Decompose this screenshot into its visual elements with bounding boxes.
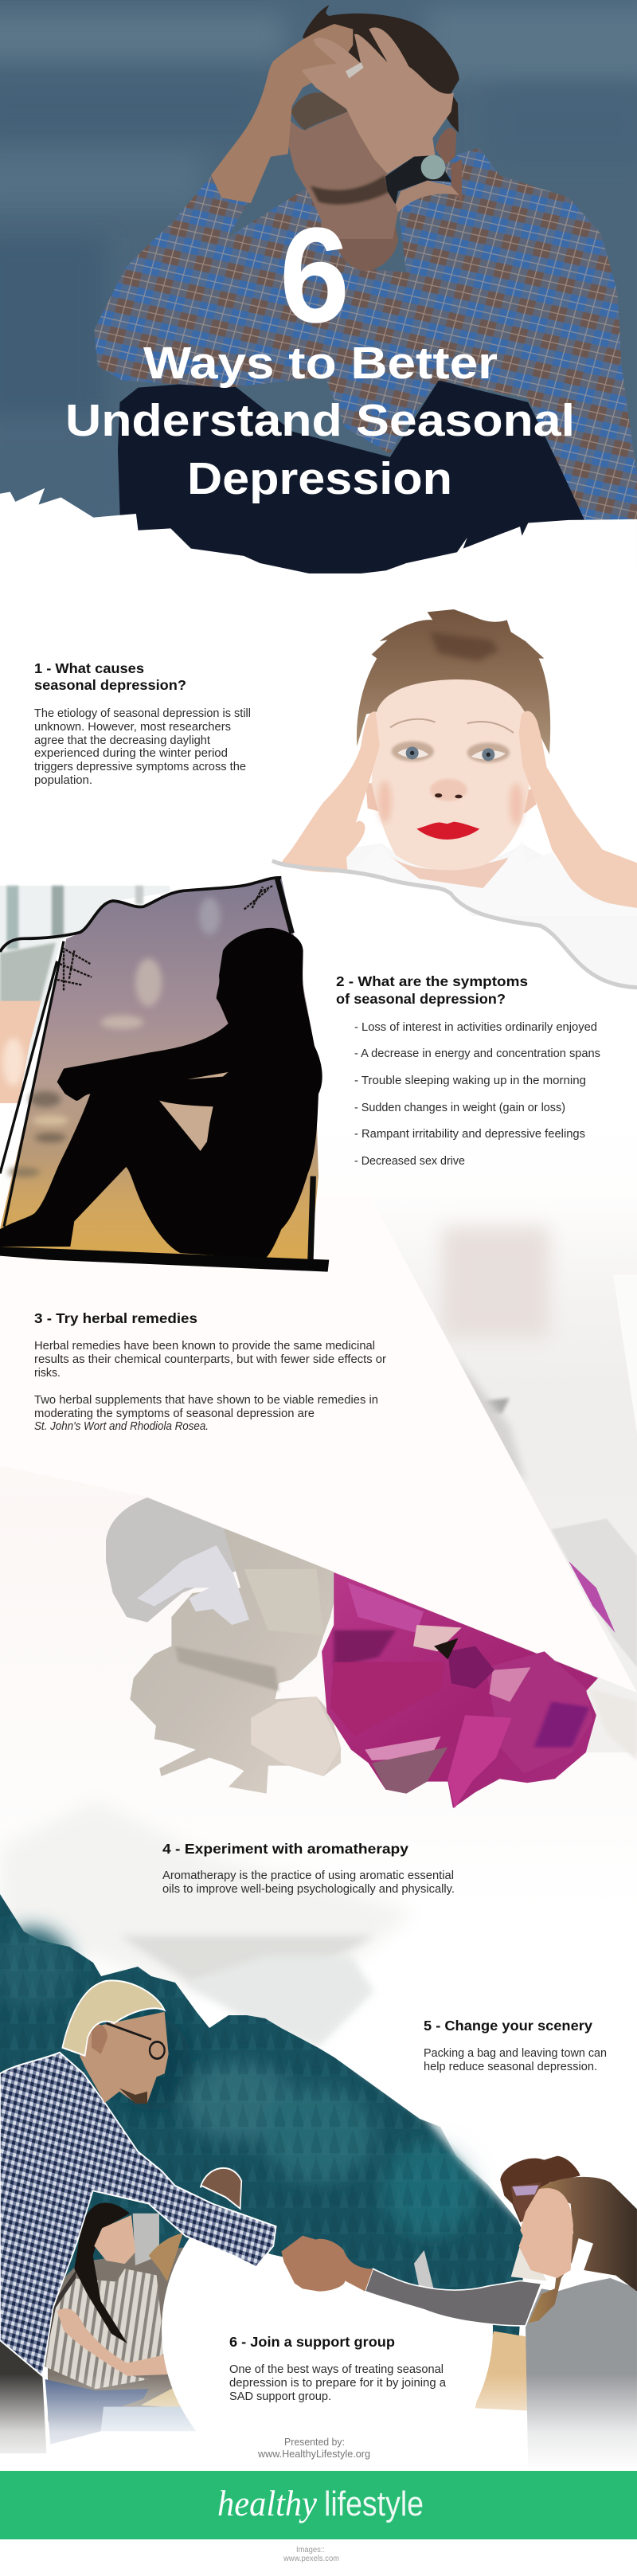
presented by credit: Presented by: — [284, 2437, 345, 2448]
section 1 text: unknown. However, most researchers — [34, 721, 231, 734]
section 1 text: The etiology of seasonal depression is still — [34, 707, 251, 720]
window sill — [0, 1247, 329, 1272]
image credit — [283, 2546, 339, 2563]
flower photo on folded paper — [106, 1497, 637, 1808]
seated woman left — [44, 2202, 201, 2445]
sunset sky — [0, 878, 318, 1260]
tree twigs — [57, 886, 273, 990]
symptoms list — [354, 1021, 600, 1168]
section 2 text: 2 - What are the symptoms — [336, 973, 528, 989]
magenta flower — [322, 1572, 598, 1808]
nose — [430, 779, 467, 801]
hair front — [291, 92, 348, 130]
hair dark patch — [430, 632, 499, 661]
image credit: Images:: — [296, 2546, 325, 2554]
flower behind paper — [551, 1519, 637, 1760]
healthy lifestyle logo: healthy — [217, 2483, 318, 2523]
presented by credit — [257, 2437, 370, 2460]
section 4 text: Aromatherapy is the practice of using aromatic essential — [162, 1869, 454, 1882]
symptoms list: - Decreased sex drive — [354, 1155, 465, 1168]
group photo — [0, 1980, 637, 2496]
wavy hair — [528, 2177, 637, 2323]
background fog and flower area — [0, 1115, 637, 1912]
section 3 text — [34, 1310, 386, 1433]
ring — [346, 62, 364, 78]
forest light and shade — [0, 1928, 478, 2238]
section 2 text — [336, 973, 600, 1168]
wooden table right — [475, 2331, 531, 2411]
hero number 6: 6 — [279, 200, 350, 351]
blond hair — [62, 1980, 165, 2056]
section 5 text: 5 - Change your scenery — [424, 2018, 592, 2034]
section 5 text — [424, 2018, 607, 2073]
section 5 text: help reduce seasonal depression. — [424, 2061, 597, 2073]
section 3 text: Two herbal supplements that have shown to be viable remedies in — [34, 1394, 378, 1407]
section 2 text: of seasonal depression? — [336, 991, 506, 1007]
room behind seated people — [48, 2246, 191, 2421]
section 1 text: 1 - What causes — [34, 660, 144, 676]
person behind woman — [500, 2156, 580, 2222]
section 6 text: One of the best ways of treating seasonal — [229, 2363, 444, 2376]
healthy lifestyle logo: lifestyle — [324, 2484, 424, 2523]
plaid shirt — [94, 148, 637, 521]
red lips — [416, 822, 479, 840]
blurred candle scene — [334, 1195, 637, 1752]
white flower — [130, 1528, 341, 1794]
symptoms list: - A decrease in energy and concentration spans — [354, 1047, 600, 1060]
section 1 text: triggers depressive symptoms across the — [34, 761, 246, 773]
forehead and face — [288, 112, 398, 239]
shirt — [0, 2053, 276, 2376]
hero title — [65, 338, 575, 504]
cheek blush — [378, 781, 523, 826]
blond man in checked shirt — [0, 1980, 276, 2453]
section 4 text: oils to improve well-being psychologically and physically. — [162, 1883, 455, 1896]
folded paper sheet — [0, 1195, 637, 1693]
section 1 text: population. — [34, 774, 92, 787]
window frame — [0, 878, 313, 1260]
section 6 text: SAD support group. — [229, 2390, 331, 2403]
section 1 text: seasonal depression? — [34, 677, 186, 693]
healthy lifestyle logo — [217, 2483, 424, 2523]
hero photo: man holding his head — [0, 0, 637, 585]
fade to white at bottom — [0, 2374, 637, 2471]
section 6 text: depression is to prepare for it by joining a — [229, 2377, 447, 2390]
flower petal details — [330, 1583, 593, 1808]
symptoms list: - Loss of interest in activities ordinarily enjoyed — [354, 1021, 597, 1034]
section 3 text: results as their chemical counterparts, but with fewer side effects or — [34, 1353, 386, 1366]
section 3 text: risks. — [34, 1367, 61, 1380]
fog over ridge — [350, 2047, 565, 2222]
hero title: Understand Seasonal — [65, 395, 575, 446]
section 3 text: 3 - Try herbal remedies — [34, 1310, 197, 1326]
tree texture — [0, 1894, 526, 2358]
misty hills behind forest — [0, 1800, 414, 2047]
white petal details — [137, 1545, 341, 1776]
section 3 text: Herbal remedies have been known to provide the same medicinal — [34, 1340, 375, 1353]
section 1 text: agree that the decreasing daylight — [34, 734, 210, 747]
photo: silhouette at window — [0, 878, 329, 1272]
section 1 text — [34, 660, 251, 787]
right hand — [301, 27, 454, 174]
glasses — [106, 2023, 165, 2059]
photo: stressed woman — [281, 609, 637, 916]
section 3 text: St. John's Wort and Rhodiola Rosea. — [34, 1420, 209, 1433]
torn white edge — [0, 488, 637, 585]
hero title: Depression — [187, 453, 452, 504]
eyes — [390, 719, 514, 763]
section 1 text: experienced during the winter period — [34, 747, 228, 760]
white turtleneck collar — [348, 840, 637, 916]
section 6 text — [229, 2334, 447, 2403]
gaps between arm and leg — [159, 1072, 229, 1151]
symptoms list: - Sudden changes in weight (gain or loss) — [354, 1102, 565, 1114]
grey contour line — [272, 861, 637, 988]
hair back — [303, 6, 459, 133]
section 6 text: 6 - Join a support group — [229, 2334, 395, 2350]
ear — [92, 2024, 107, 2054]
section 3 text: moderating the symptoms of seasonal depression are — [34, 1407, 315, 1420]
sitting silhouette — [0, 928, 322, 1259]
beard — [119, 2089, 147, 2104]
hero title: Ways to Better — [143, 338, 498, 389]
pants — [0, 2340, 46, 2453]
neck — [390, 856, 508, 888]
handshake — [281, 2236, 373, 2292]
hair — [357, 609, 550, 754]
bald man in background — [133, 2168, 241, 2282]
symptoms list: - Rampant irritability and depressive feelings — [354, 1128, 585, 1141]
ears — [365, 783, 536, 814]
face — [519, 2188, 573, 2278]
clouds — [8, 898, 221, 1177]
image credit: www.pexels.com — [283, 2554, 339, 2563]
forest mountain — [0, 1894, 565, 2358]
woman and colleague on right — [365, 2156, 637, 2469]
brow shadow — [311, 175, 390, 205]
pants — [118, 380, 589, 574]
sleeve — [365, 2269, 541, 2326]
lower turtleneck shape — [284, 844, 637, 988]
left forearm and hand — [211, 24, 353, 203]
white circle panel — [162, 2238, 493, 2431]
face — [372, 677, 530, 871]
hero sky backdrop — [0, 0, 637, 574]
arm under watch — [396, 181, 459, 213]
wristwatch — [385, 155, 451, 205]
grey sweater body — [526, 2278, 637, 2469]
lower face — [321, 213, 398, 271]
laptop — [414, 2250, 446, 2292]
section 5 text: Packing a bag and leaving town can — [424, 2047, 607, 2060]
right hand — [519, 711, 637, 908]
section 4 text — [162, 1841, 455, 1896]
symptoms list: - Trouble sleeping waking up in the morning — [354, 1075, 586, 1087]
grey upper petals — [106, 1497, 240, 1623]
pale blouse in background — [511, 2236, 547, 2280]
section 4 text: 4 - Experiment with aromatherapy — [162, 1841, 408, 1857]
left hand — [281, 711, 380, 872]
green footer banner — [0, 2471, 637, 2539]
head — [80, 2012, 169, 2103]
blurred room behind window — [0, 886, 170, 1103]
head and hands — [211, 6, 462, 239]
forest base — [0, 1894, 526, 2358]
presented by credit: www.HealthyLifestyle.org — [257, 2449, 370, 2460]
ear and neck — [436, 128, 462, 202]
